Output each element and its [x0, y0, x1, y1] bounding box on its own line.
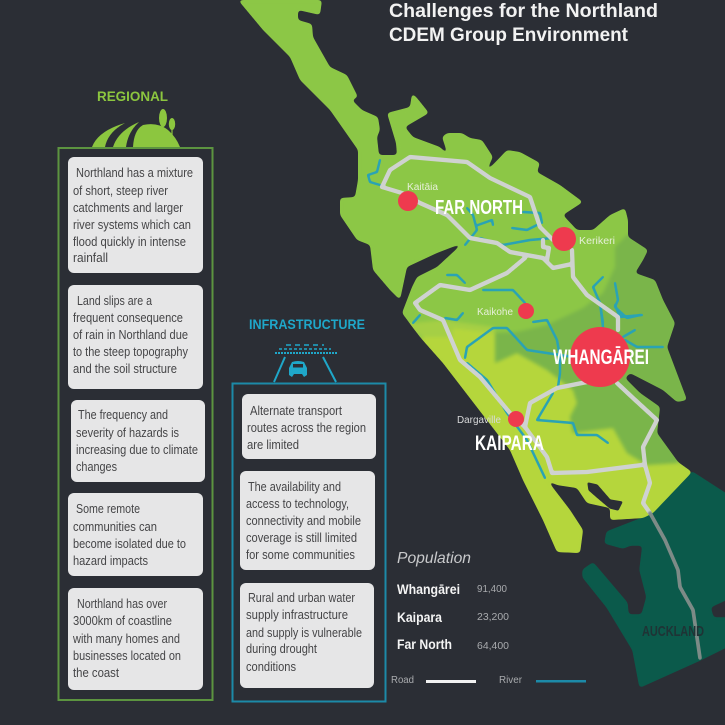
card: land slips: Land slips are a [77, 294, 152, 308]
legend [391, 675, 586, 686]
town labels [407, 182, 615, 426]
title: Challenges for the Northland [389, 1, 658, 22]
card: river systems: catchments and larger [73, 201, 183, 215]
card: land slips: to the steep topography [73, 345, 189, 359]
card: technology access: access to technology, [246, 497, 349, 511]
district labels [435, 197, 704, 640]
card: coastline: the coast [73, 666, 119, 680]
panel: regional [58, 148, 212, 700]
region: Auckland [583, 472, 725, 687]
card: remote communities: communities can [73, 520, 157, 534]
card: water supply: during drought [246, 642, 317, 656]
card: river systems: river systems which can [73, 218, 191, 232]
card: hazard frequency: The frequency and [78, 408, 168, 422]
title: CDEM Group Environment [389, 25, 629, 46]
card: remote communities: Some remote [76, 502, 140, 516]
population table: 23,200 [477, 612, 509, 623]
legend: River [499, 675, 523, 686]
card: technology access [240, 471, 375, 570]
town labels: Kerikeri [579, 236, 615, 247]
panel: infrastructure [232, 384, 386, 702]
town labels: Dargaville [457, 415, 501, 426]
town labels: Kaikohe [477, 307, 513, 318]
region: Northland land mass [240, 0, 690, 553]
population table: Kaipara [397, 609, 442, 625]
card: coastline: with many homes and [72, 632, 180, 646]
district labels: FAR NORTH [435, 197, 523, 219]
card: coastline: businesses located on [73, 649, 181, 663]
heading: infrastructure: INFRASTRUCTURE [249, 316, 365, 332]
card: water supply: supply infrastructure [246, 608, 348, 622]
card: technology access: for some communities [246, 548, 355, 562]
icon: hill and trees [92, 109, 180, 147]
card: land slips: frequent consequence [73, 311, 183, 325]
map: Northland and Auckland [230, 0, 725, 687]
card: river systems [68, 157, 203, 273]
card: hazard frequency: severity of hazards is [76, 426, 179, 440]
town markers [398, 191, 630, 427]
card: remote communities: hazard impacts [73, 554, 148, 568]
harbour islet [588, 483, 622, 510]
card: water supply: Rural and urban water [248, 591, 355, 605]
card: technology access: connectivity and mobile [246, 514, 361, 528]
card: transport routes: are limited [247, 438, 299, 452]
card: land slips [68, 285, 203, 389]
legend: Road [391, 675, 414, 686]
card: technology access: The availability and [248, 480, 341, 494]
icon: car on road [274, 345, 337, 382]
district labels: KAIPARA [475, 432, 544, 455]
card: coastline: Northland has over [77, 597, 167, 611]
card: technology access: coverage is still limited [246, 531, 357, 545]
card: remote communities [68, 493, 203, 576]
heading: regional: REGIONAL [97, 88, 168, 104]
card: coastline: 3000km of coastline [73, 614, 172, 628]
card: transport routes [242, 394, 376, 459]
card: water supply: and supply is vulnerable [246, 626, 362, 640]
card: land slips: of rain in Northland due [73, 328, 188, 342]
card: hazard frequency: increasing due to climate [76, 443, 198, 457]
card: water supply [240, 583, 374, 688]
title [389, 1, 658, 46]
district labels: AUCKLAND [642, 623, 704, 640]
population table: Population [397, 550, 471, 567]
card: river systems: of short, steep river [73, 184, 168, 198]
card: remote communities: become isolated due to [73, 537, 186, 551]
card: transport routes: Alternate transport [250, 404, 342, 418]
district labels: WHANGĀREI [553, 346, 649, 369]
town labels: Kaitāia [407, 182, 438, 193]
population table [397, 550, 509, 652]
population table: Whangārei [397, 581, 460, 597]
card: water supply: conditions [246, 660, 296, 674]
card: river systems: rainfall [73, 251, 108, 265]
card: coastline [68, 588, 203, 690]
population table: 91,400 [477, 584, 507, 595]
population table: 64,400 [477, 641, 509, 652]
card: hazard frequency: changes [76, 460, 117, 474]
card: river systems: Northland has a mixture [76, 166, 193, 180]
population table: Far North [397, 636, 452, 652]
card: river systems: flood quickly in intense [73, 235, 186, 249]
card: land slips: and the soil structure [73, 362, 177, 376]
rivers [368, 160, 663, 478]
roads [382, 157, 700, 658]
card: transport routes: routes across the region [247, 421, 366, 435]
card: hazard frequency [71, 400, 205, 482]
